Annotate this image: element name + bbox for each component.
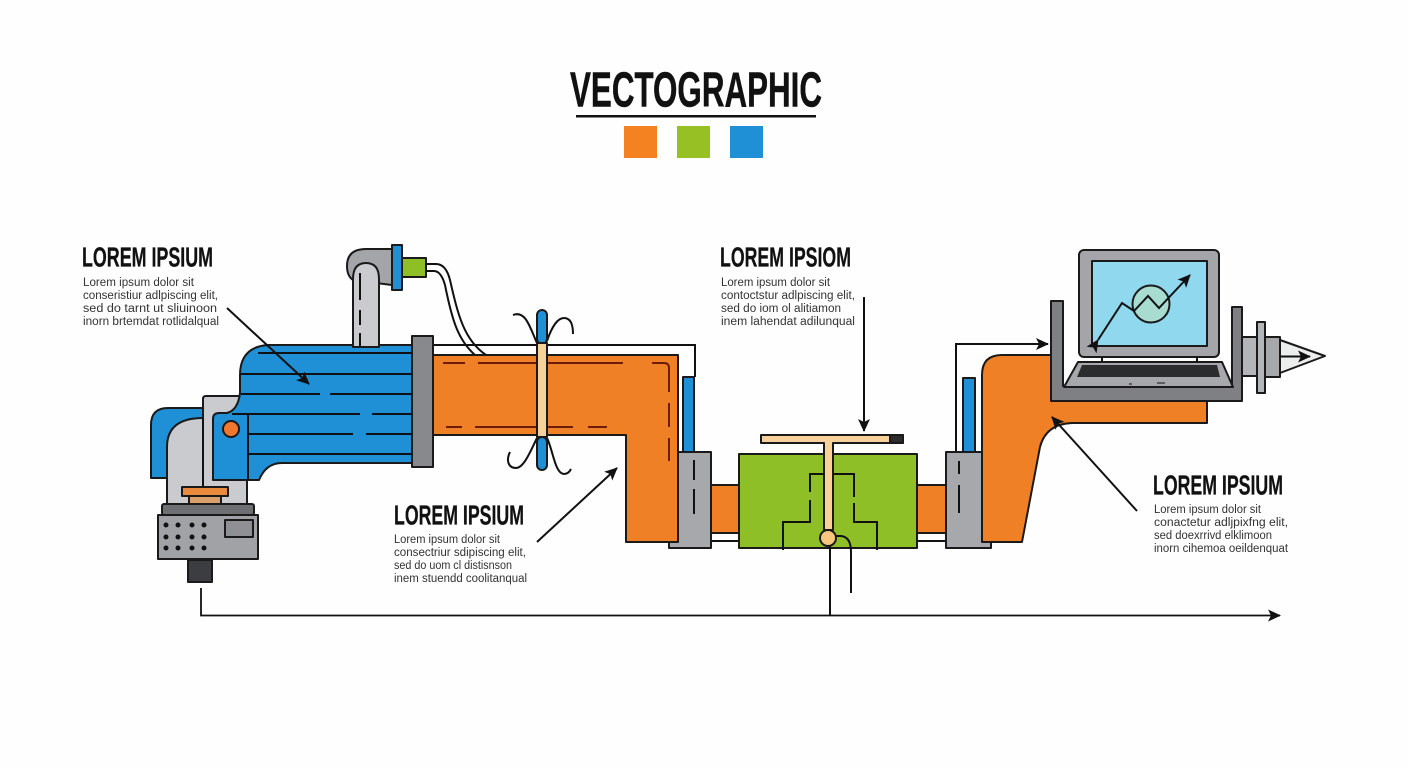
text block: top left: LOREM IPSIUM: [82, 242, 213, 272]
left machine: motor assembly: [151, 345, 412, 582]
pivot: [820, 530, 836, 546]
text block: lower middle: consectriur sdipiscing elit,: [394, 547, 526, 559]
arrow to right duct: [1052, 417, 1137, 511]
clamp band with wires: [508, 310, 573, 474]
title: VECTOGRAPHIC: [570, 64, 822, 118]
stands: [1102, 357, 1197, 364]
arrow to motor: [227, 308, 309, 384]
gray elbow: [347, 249, 392, 285]
keyboard: [1077, 365, 1220, 377]
thin return line above pipe: [433, 345, 695, 377]
text block: lower middle: Lorem ipsum dolor sit: [394, 534, 501, 546]
text block: lower right: conactetur adljpixfng elit,: [1154, 517, 1288, 529]
text block: lower middle: sed do uom cl distisnson: [394, 560, 512, 572]
blue band ends: [537, 310, 547, 344]
screen: [1092, 261, 1207, 346]
text block: top left: inorn brtemdat rotlidalqual: [83, 316, 219, 328]
gray tray: [1051, 301, 1242, 401]
text block: upper middle: inem lahendat adilunqual: [721, 316, 855, 328]
laptop base: [1064, 362, 1233, 387]
orange cap plate: [182, 487, 228, 496]
circuit traces: [783, 474, 877, 550]
housing divider: [202, 418, 204, 487]
text block: lower right: Lorem ipsum dolor sit: [1154, 504, 1262, 516]
text block: lower right: [1153, 470, 1289, 555]
blue elbow pipe: [151, 408, 212, 478]
arrow to T handle: [863, 297, 865, 431]
text block: lower right: LOREM IPSIUM: [1153, 470, 1283, 500]
tan spacer: [189, 496, 221, 504]
text block: lower middle: LOREM IPSIUM: [394, 500, 524, 530]
blue motor body: [213, 345, 412, 480]
text block: lower middle: [394, 500, 527, 585]
tan T handle: [761, 435, 903, 530]
orange pipe dashes: [443, 363, 669, 461]
green sensor: [402, 258, 426, 277]
dark stem: [188, 560, 212, 582]
text block: top left: [82, 242, 219, 328]
colour swatches: [624, 126, 763, 158]
text block: lower right: inorn cihemoa oeildenquat: [1154, 543, 1289, 555]
top vertical pipe with sensor: [347, 245, 486, 355]
motor fins: [232, 353, 412, 480]
control box dots: [164, 522, 206, 550]
blue sensor flange: [392, 245, 402, 290]
gray flange: [412, 336, 433, 467]
right valve block: [946, 344, 1048, 548]
right nozzle: [1242, 322, 1325, 393]
text block: upper middle: contoctstur adlpiscing elit,: [721, 290, 855, 302]
handle tip: [890, 435, 903, 443]
bottom process line with arrow: [201, 588, 1280, 616]
green control unit: [739, 435, 917, 593]
orange indicator: [223, 421, 239, 437]
text block: upper middle: Lorem ipsum dolor sit: [721, 277, 831, 289]
callout arrow to orange pipe: [537, 468, 617, 542]
tan band centre: [537, 343, 547, 437]
laptop station: [1051, 250, 1242, 401]
text block: upper middle: LOREM IPSIOM: [720, 242, 851, 272]
wire loops: [508, 314, 573, 474]
chart line: [1098, 275, 1190, 340]
text block: top left: sed do tarnt ut sliuinoon: [83, 303, 217, 315]
control box display: [225, 520, 253, 537]
pivot drop line: [829, 546, 831, 615]
sensor wires: [426, 264, 486, 355]
text block: top left: Lorem ipsum dolor sit: [83, 277, 195, 289]
text block: upper middle: sed do iom ol alitiamon: [721, 303, 841, 315]
left valve block: [669, 377, 711, 548]
chart circle: [1132, 286, 1170, 322]
orange connectors around green unit: [711, 485, 946, 541]
gray control box: [158, 515, 258, 559]
right orange duct: [982, 355, 1207, 542]
wire: [836, 536, 851, 593]
dark top plate: [162, 504, 254, 515]
text block: lower right: sed doexrrivd elklimoon: [1154, 530, 1272, 542]
text block: top left: conseristiur adlpiscing elit,: [83, 290, 218, 302]
text block: upper middle: [720, 242, 855, 328]
text block: lower middle: inem stuendd coolitanqual: [394, 573, 527, 585]
orange pipe: [433, 355, 678, 542]
monitor: [1079, 250, 1219, 357]
light gray elbow and housing: [167, 396, 247, 505]
vertical pipe: [353, 263, 379, 347]
